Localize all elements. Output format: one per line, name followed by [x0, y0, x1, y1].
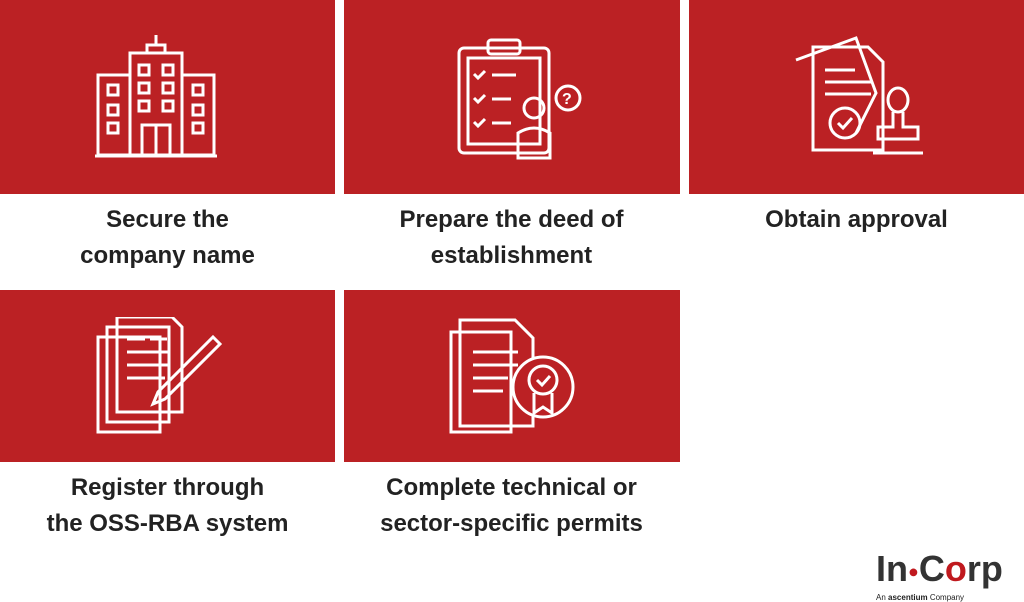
panel: register [0, 290, 335, 462]
label: register: Register through [71, 474, 264, 501]
panel: permits [344, 290, 680, 462]
label: secure [80, 206, 255, 269]
panel: deed [344, 0, 680, 194]
label: secure: Secure the [106, 206, 229, 233]
icon: clipboard [458, 38, 582, 160]
icon: building [95, 35, 217, 158]
panel: secure name [0, 0, 335, 194]
label: approval: Obtain approval [765, 206, 948, 233]
icon: certificate [450, 318, 574, 434]
panel: approval [689, 0, 1024, 194]
label: deed: establishment [431, 242, 592, 269]
label: permits: Complete technical or [386, 474, 637, 501]
icon: documents with pen [96, 317, 222, 434]
logo: In●Corp [876, 548, 1003, 589]
label: secure: company name [80, 242, 255, 269]
icon: clipboard: ? [562, 91, 572, 108]
label: deed [399, 206, 624, 269]
label: register [46, 474, 288, 537]
label: deed: Prepare the deed of [399, 206, 624, 233]
label: register: the OSS-RBA system [47, 510, 288, 537]
label: permits [380, 474, 643, 537]
icon: stamped document [796, 36, 923, 154]
label: permits: sector-specific permits [380, 510, 643, 537]
